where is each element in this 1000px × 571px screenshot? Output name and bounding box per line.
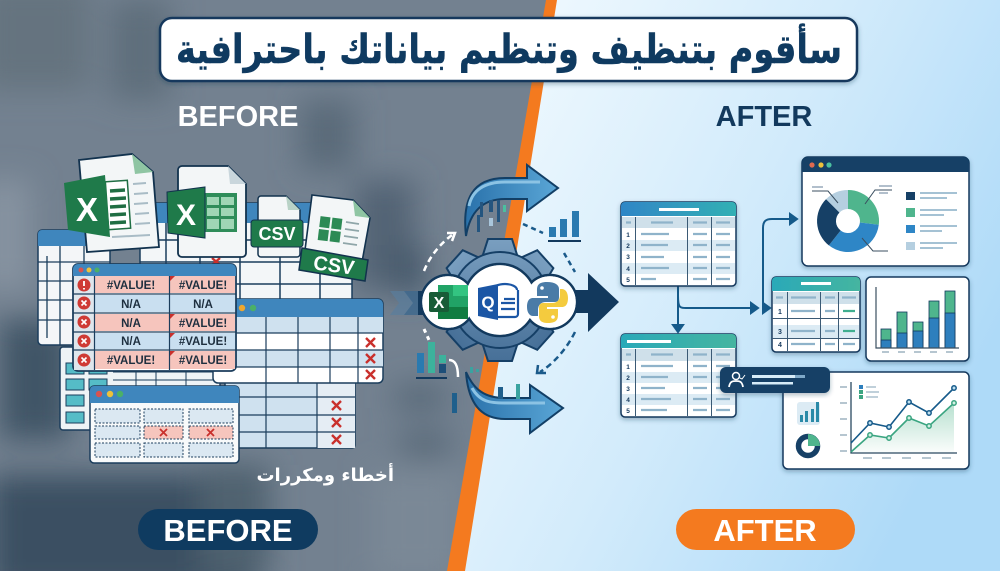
table: lower: [621, 334, 736, 417]
tool badges: [421, 264, 577, 336]
back grid window: [140, 203, 352, 303]
icon: csv file one: [251, 196, 303, 257]
pill: after: [676, 509, 855, 550]
table: middle: 4: [778, 342, 782, 349]
table: upper: 5: [626, 277, 630, 284]
left background: [0, 0, 560, 571]
arrow: top curved: [465, 165, 558, 236]
error table window: N/A: [121, 299, 141, 311]
error table window: N/A: [121, 336, 141, 348]
left back window: [38, 230, 110, 345]
mini bar chart upper right: [548, 211, 581, 242]
orange diagonal stripe: [447, 0, 557, 571]
icon: excel file two: X: [176, 199, 196, 232]
title banner: سأقوم بتنظيف وتنظيم بياناتك باحترافية: [176, 23, 842, 74]
dashed flow arrows: [424, 224, 575, 377]
error table window: #VALUE!: [179, 280, 227, 292]
icon: excel: X: [434, 295, 445, 312]
mini bar chart lower left: [416, 342, 447, 379]
heading: after: AFTER: [716, 101, 812, 133]
line chart card: [783, 372, 969, 469]
pill: before: [138, 509, 318, 550]
table: upper: 4: [626, 266, 630, 273]
dotted window: [90, 386, 239, 463]
dashboard: donut chart: [802, 157, 969, 266]
error table window: #VALUE!: [107, 280, 155, 292]
donut: [812, 186, 892, 252]
mini bars under top arrow: [477, 200, 506, 232]
error table window: #VALUE!: [179, 355, 227, 367]
heading: before: BEFORE: [178, 101, 298, 133]
table: upper: 3: [626, 254, 630, 261]
panel: messy spreadsheets: [38, 203, 383, 463]
icon: gear: [441, 239, 559, 361]
callout: user check: [720, 367, 830, 393]
icon: power query: Q: [481, 293, 495, 312]
right window with error marks: [213, 299, 383, 383]
icon: small donut: [798, 434, 820, 456]
table: middle: [772, 277, 860, 352]
icon: excel: [429, 285, 468, 319]
error table window: #VALUE!: [179, 318, 227, 330]
legend: [906, 192, 957, 250]
table: lower: 2: [626, 375, 630, 382]
icon: csv file two: [299, 195, 370, 281]
arrow: bottom curved: [466, 372, 563, 433]
table: upper: [621, 202, 736, 286]
table: upper: 1: [626, 232, 630, 239]
icon: csv file one: CSV: [258, 224, 296, 244]
icon: excel file one: X: [76, 191, 98, 228]
arrow: chevrons into process: [390, 291, 432, 315]
under-right window with error marks: [225, 380, 355, 448]
table: middle: 1: [778, 309, 782, 316]
error table window: N/A: [193, 299, 213, 311]
icon: csv file two: CSV: [312, 252, 356, 280]
table: lower: 5: [626, 408, 630, 415]
table: middle: 3: [778, 329, 782, 336]
error table window: #VALUE!: [179, 336, 227, 348]
icon: excel file one: [64, 154, 159, 252]
error table window: [73, 264, 236, 371]
table: lower: 4: [626, 397, 630, 404]
error table window: N/A: [121, 318, 141, 330]
caption: errors and duplicates: أخطاء ومكررات: [256, 463, 394, 486]
icon: excel file two: [167, 166, 246, 257]
lower left window with teal cells: [60, 347, 220, 430]
pill: after: AFTER: [713, 513, 817, 548]
table: lower: 3: [626, 386, 630, 393]
error table window: #VALUE!: [107, 355, 155, 367]
mini bars above bottom arrow: [452, 367, 520, 413]
table: lower: 1: [626, 364, 630, 371]
icon: small bars: [797, 402, 820, 425]
arrow: output right: [565, 273, 619, 332]
table: upper: 2: [626, 243, 630, 250]
stacked bar chart card: [866, 277, 969, 361]
pill: before: BEFORE: [163, 513, 293, 548]
connector lines: [673, 214, 797, 332]
icon: python: [527, 282, 568, 323]
icon: power query: [478, 284, 518, 320]
